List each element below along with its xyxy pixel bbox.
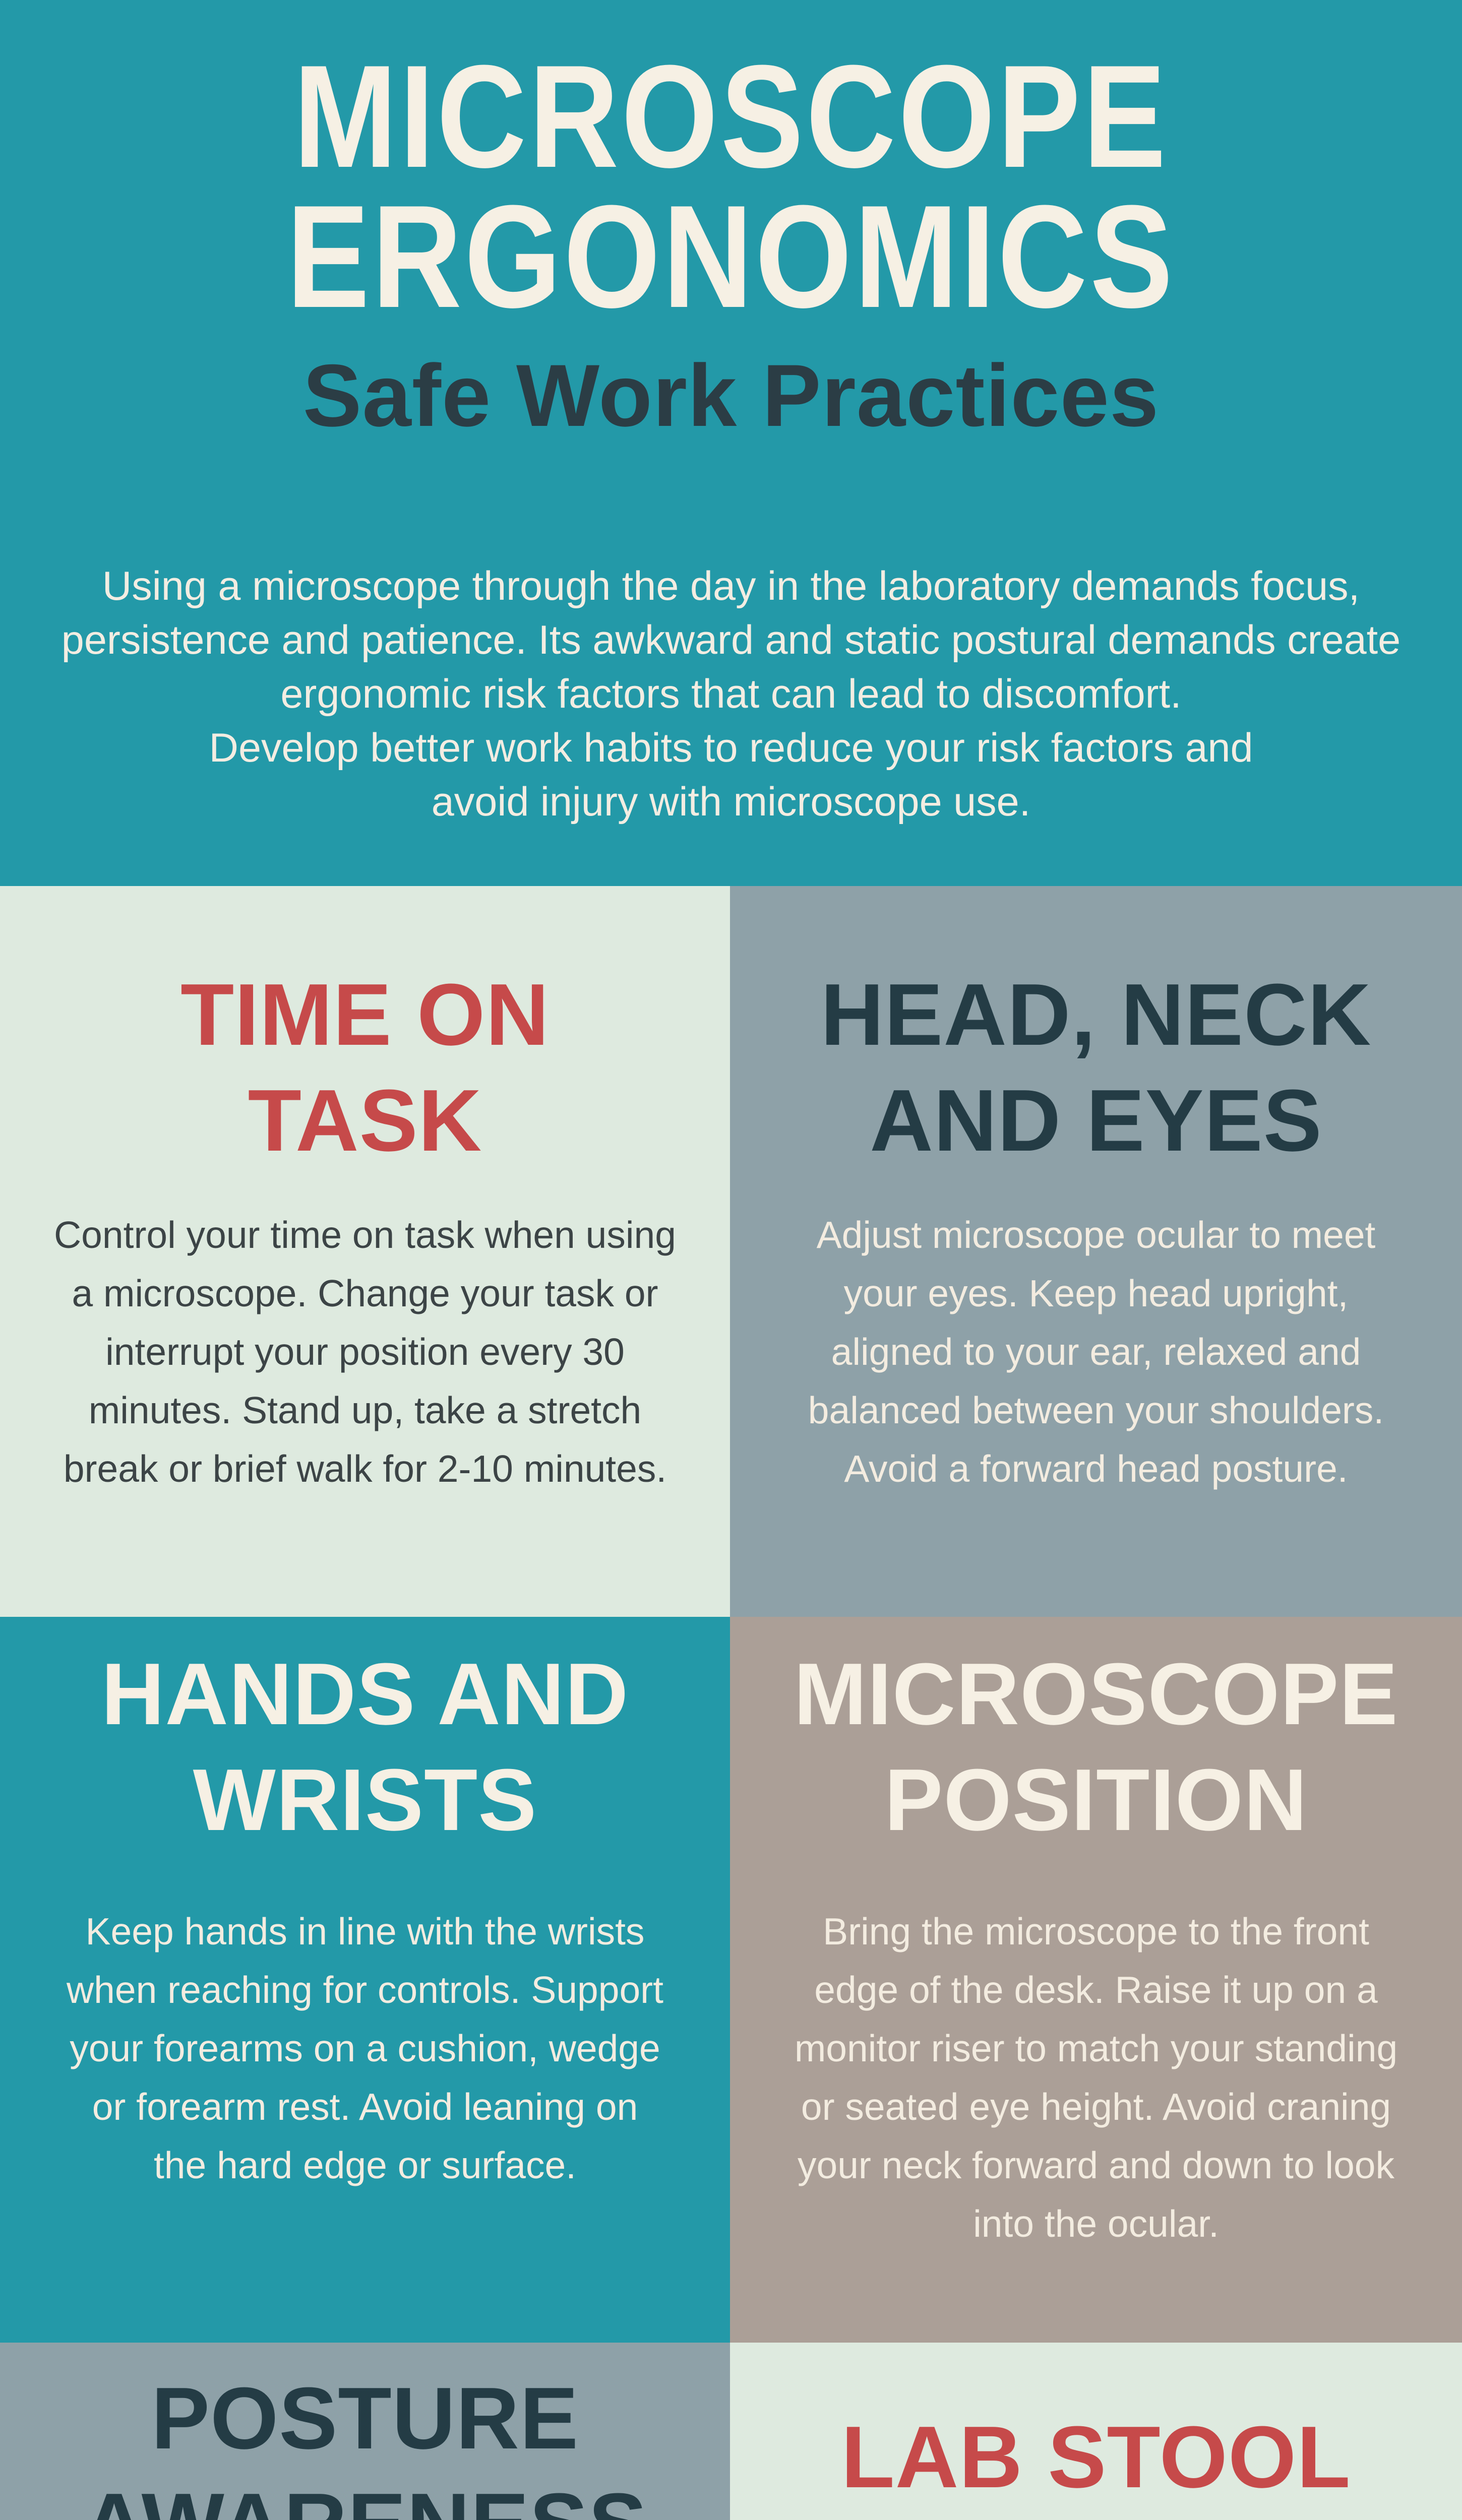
panel: hands and wrists <box>0 1617 730 2343</box>
heading <box>180 965 550 1169</box>
body text: Bring the microscope to the front <box>823 1910 1369 1952</box>
title <box>287 35 1175 338</box>
panel: microscope position <box>730 1617 1462 2343</box>
body text <box>67 1910 663 2186</box>
body text: or seated eye height. Avoid craning <box>801 2086 1391 2128</box>
heading: MICROSCOPE <box>794 1645 1398 1743</box>
body text: minutes. Stand up, take a stretch <box>89 1389 641 1431</box>
body text <box>54 1214 676 1490</box>
panel: time on task <box>0 886 730 1617</box>
body text: Avoid a forward head posture. <box>844 1447 1348 1490</box>
header panel <box>0 0 1462 886</box>
body text: your neck forward and down to look <box>798 2144 1394 2186</box>
intro text: Using a microscope through the day in the laboratory demands focus, <box>102 563 1360 609</box>
intro text: avoid injury with microscope use. <box>432 779 1030 825</box>
heading <box>821 965 1371 1169</box>
body text: interrupt your position every 30 <box>105 1331 625 1373</box>
body text: Adjust microscope ocular to meet <box>817 1214 1375 1256</box>
title: MICROSCOPE <box>293 35 1169 198</box>
heading: HEAD, NECK <box>821 965 1371 1063</box>
heading <box>83 2369 647 2520</box>
intro text: persistence and patience. Its awkward and static postural demands create <box>62 617 1400 663</box>
body text: aligned to your ear, relaxed and <box>831 1331 1361 1373</box>
panel: posture awareness <box>0 2343 730 2520</box>
body text: your forearms on a cushion, wedge <box>70 2027 660 2069</box>
intro text: ergonomic risk factors that can lead to discomfort. <box>280 671 1182 717</box>
body text <box>795 1910 1397 2245</box>
heading: TIME ON <box>180 965 550 1063</box>
heading: AND EYES <box>870 1071 1322 1169</box>
body text: Keep hands in line with the wrists <box>86 1910 644 1952</box>
heading <box>101 1645 629 1849</box>
intro text <box>62 563 1400 825</box>
body text: a microscope. Change your task or <box>72 1272 658 1314</box>
heading: POSITION <box>884 1750 1308 1849</box>
heading: HANDS AND <box>101 1645 629 1743</box>
body text: Control your time on task when using <box>54 1214 676 1256</box>
body text: the hard edge or surface. <box>154 2144 576 2186</box>
intro text: Develop better work habits to reduce your risk factors and <box>209 725 1253 771</box>
panel: head neck eyes <box>730 886 1462 1617</box>
body text: monitor riser to match your standing <box>795 2027 1397 2069</box>
body text: edge of the desk. Raise it up on a <box>814 1969 1378 2011</box>
heading: LAB STOOL <box>841 2408 1351 2506</box>
body text: balanced between your shoulders. <box>808 1389 1384 1431</box>
panel: lab stool <box>730 2343 1462 2520</box>
title: ERGONOMICS <box>287 175 1175 338</box>
subtitle: Safe Work Practices <box>303 347 1159 445</box>
body text: or forearm rest. Avoid leaning on <box>92 2086 638 2128</box>
heading: POSTURE <box>151 2369 579 2467</box>
body text <box>808 1214 1384 1490</box>
body text: into the ocular. <box>973 2202 1219 2245</box>
heading: TASK <box>248 1071 482 1169</box>
heading: WRISTS <box>193 1750 537 1849</box>
body text: break or brief walk for 2-10 minutes. <box>64 1447 666 1490</box>
body text: your eyes. Keep head upright, <box>844 1272 1348 1314</box>
heading <box>794 1645 1398 1849</box>
body text: when reaching for controls. Support <box>67 1969 663 2011</box>
